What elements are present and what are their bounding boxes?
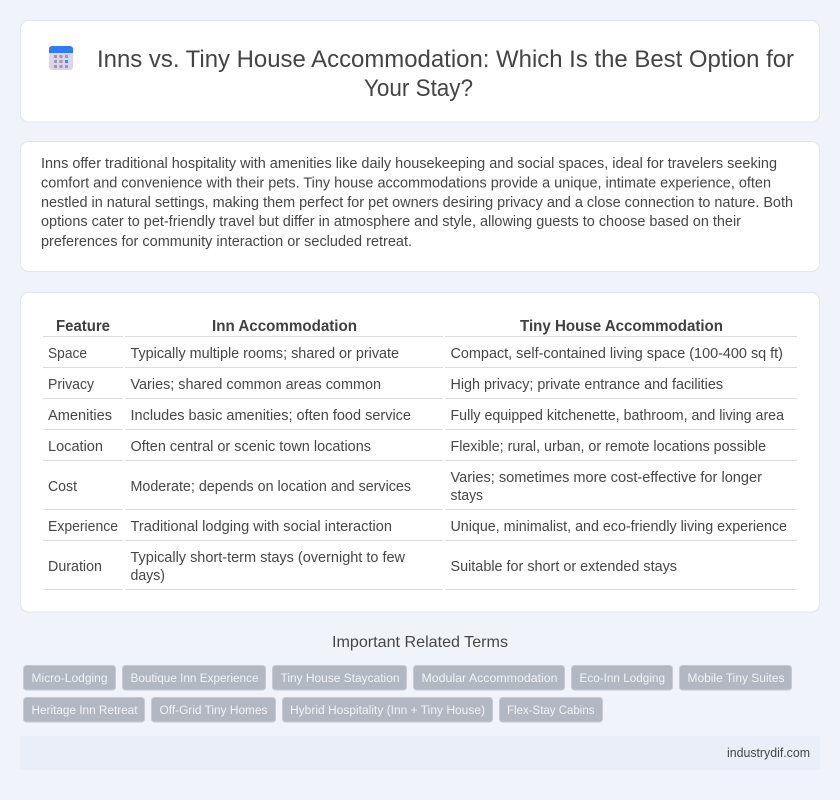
row: duration: Typically short-term stays (overnight to few bbox=[130, 550, 406, 566]
row: experience: Experience bbox=[48, 519, 118, 535]
intro paragraph bbox=[41, 156, 793, 250]
row: space: Space bbox=[48, 346, 87, 362]
panel: comparison table bbox=[20, 292, 820, 612]
panel: title header bbox=[20, 20, 820, 122]
table header row bbox=[43, 318, 797, 337]
row: amenities: Fully equipped kitchenette, bathroom, and living area bbox=[450, 408, 784, 424]
table header row: Inn Accommodation bbox=[212, 318, 357, 335]
title bbox=[97, 46, 794, 102]
intro paragraph: options cater to pet-friendly travel but differ in atmosphere and style, allowing guests to choose based on their bbox=[41, 214, 741, 230]
tag: eco-inn lodging: Eco-Inn Lodging bbox=[580, 671, 665, 685]
row: location: Flexible; rural, urban, or remote locations possible bbox=[450, 439, 766, 455]
row: duration: Suitable for short or extended stays bbox=[450, 559, 677, 575]
tag: micro-lodging bbox=[24, 666, 116, 690]
tag: off-grid tiny homes bbox=[152, 698, 276, 722]
row: space bbox=[43, 346, 797, 368]
tag: hybrid hospitality bbox=[282, 698, 492, 722]
footer source text: industrydif.com bbox=[727, 746, 810, 760]
table header row: Feature bbox=[56, 318, 110, 335]
row: privacy bbox=[43, 377, 797, 399]
tag: tiny house staycation bbox=[272, 666, 406, 690]
tag: micro-lodging: Micro-Lodging bbox=[32, 671, 108, 685]
tag: boutique inn experience: Boutique Inn Experience bbox=[130, 671, 259, 685]
row: location bbox=[43, 439, 797, 461]
table header row: Tiny House Accommodation bbox=[520, 318, 723, 335]
tag cloud: related terms bbox=[24, 666, 792, 722]
tag: heritage inn retreat bbox=[24, 698, 144, 722]
intro paragraph: Inns offer traditional hospitality with amenities like daily housekeeping and social spaces, ideal for travelers seeking bbox=[41, 156, 777, 172]
row: experience: Unique, minimalist, and eco-friendly living experience bbox=[450, 519, 787, 535]
row: privacy: Varies; shared common areas common bbox=[130, 377, 381, 393]
row: cost: stays bbox=[450, 488, 483, 504]
row: location: Often central or scenic town locations bbox=[130, 439, 371, 455]
tag: flex-stay cabins bbox=[500, 698, 602, 722]
row: cost: Moderate; depends on location and services bbox=[130, 479, 411, 495]
row: space: Typically multiple rooms; shared or private bbox=[130, 346, 399, 362]
row: duration: days) bbox=[130, 568, 165, 584]
title: Your Stay? bbox=[364, 75, 473, 102]
tag: off-grid tiny homes: Off-Grid Tiny Homes bbox=[160, 703, 268, 717]
row: cost bbox=[43, 470, 797, 510]
row: duration bbox=[43, 550, 797, 590]
row: space: Compact, self-contained living space (100-400 sq ft) bbox=[450, 346, 783, 362]
tag: modular accommodation: Modular Accommodation bbox=[422, 671, 558, 685]
row: privacy: Privacy bbox=[48, 377, 95, 393]
row: location: Location bbox=[48, 439, 103, 455]
tag: heritage inn retreat: Heritage Inn Retreat bbox=[32, 703, 138, 717]
icon: calendar bbox=[49, 46, 73, 70]
panel: introduction bbox=[20, 142, 820, 272]
intro paragraph: nestled in natural settings, making them perfect for pet owners desiring privacy and a close connection to nature. Both bbox=[41, 195, 793, 211]
tag: boutique inn experience bbox=[122, 666, 266, 690]
row: experience bbox=[43, 519, 797, 541]
row: amenities: Amenities bbox=[48, 408, 112, 424]
row: amenities bbox=[43, 408, 797, 430]
row: privacy: High privacy; private entrance and facilities bbox=[450, 377, 723, 393]
row: amenities: Includes basic amenities; often food service bbox=[130, 408, 411, 424]
row: duration: Duration bbox=[48, 559, 102, 575]
tag: mobile tiny suites bbox=[680, 666, 792, 690]
tag: tiny house staycation: Tiny House Staycation bbox=[280, 671, 400, 685]
intro paragraph: preferences for community interaction or secluded retreat. bbox=[41, 234, 412, 250]
tag: hybrid hospitality: Hybrid Hospitality (Inn + Tiny House) bbox=[290, 703, 485, 717]
row: cost: Varies; sometimes more cost-effective for longer bbox=[450, 470, 762, 486]
footer bbox=[20, 736, 820, 770]
title: Inns vs. Tiny House Accommodation: Which Is the Best Option for bbox=[97, 46, 794, 73]
intro paragraph: comfort and convenience with their pets. Tiny house accommodations provide a unique, intimate experience, often bbox=[41, 176, 771, 192]
tag: eco-inn lodging bbox=[572, 666, 672, 690]
heading: important related terms: Important Related Terms bbox=[332, 634, 508, 651]
row: cost: Cost bbox=[48, 479, 77, 495]
tag: mobile tiny suites: Mobile Tiny Suites bbox=[688, 671, 784, 685]
tag: modular accommodation bbox=[414, 666, 564, 690]
row: experience: Traditional lodging with social interaction bbox=[130, 519, 392, 535]
tag: flex-stay cabins: Flex-Stay Cabins bbox=[507, 703, 594, 717]
